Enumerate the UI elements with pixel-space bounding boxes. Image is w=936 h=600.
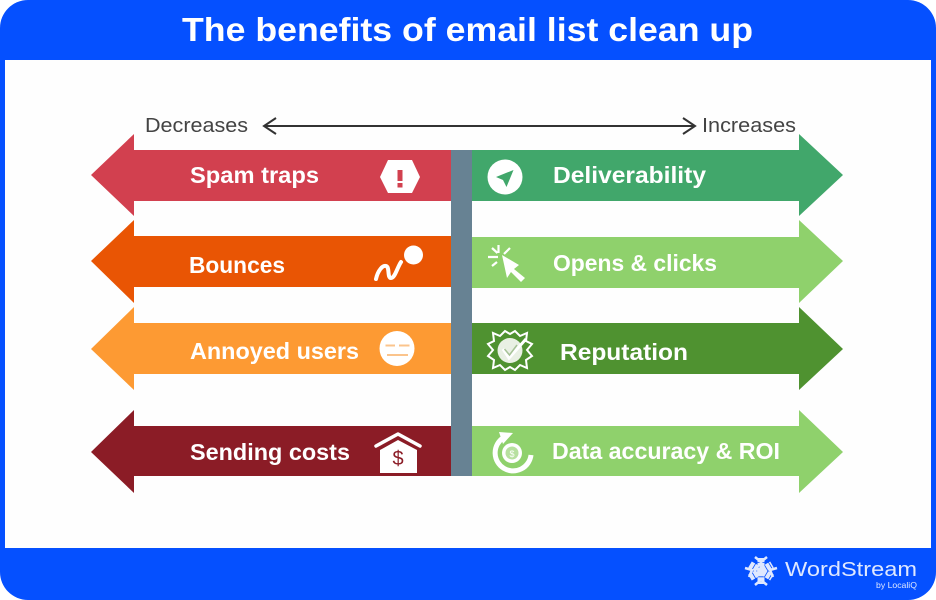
arrow: opens and clicks	[472, 220, 843, 303]
label: sending costs: Sending costs	[190, 439, 350, 465]
icon: annoyed face	[380, 331, 414, 366]
label: deliverability: Deliverability	[553, 162, 706, 188]
icon: house with dollar sign	[376, 434, 420, 473]
icon: bouncing ball	[376, 246, 423, 279]
arrow: sending costs	[91, 410, 451, 493]
icon: snowflake mark	[745, 557, 777, 585]
arrow: data accuracy and ROI	[472, 410, 843, 493]
logo wordmark: WordStream	[785, 558, 917, 581]
label: spam traps: Spam traps	[190, 162, 319, 188]
icon: circular arrow with coin	[495, 432, 531, 471]
title: The benefits of email list clean up	[182, 11, 753, 48]
label: opens and clicks: Opens & clicks	[553, 250, 717, 276]
logo: WordStream by LocaliQ	[745, 557, 917, 590]
logo tagline: by LocaliQ	[876, 580, 917, 590]
arrow: annoyed users	[91, 307, 451, 390]
icon: cursor click	[488, 245, 525, 282]
label: annoyed users: Annoyed users	[190, 338, 359, 364]
scale label: decreases: Decreases	[145, 115, 248, 137]
arrow: deliverability	[472, 134, 843, 216]
double-headed scale arrow	[264, 118, 695, 134]
scale label: increases: Increases	[702, 115, 796, 137]
arrow: bounces	[91, 220, 451, 303]
arrow: reputation	[472, 307, 843, 390]
icon: reputation badge	[488, 331, 532, 370]
icon: circular arrow with coin: $	[509, 449, 515, 459]
icon: house with dollar sign: $	[392, 448, 404, 470]
label: bounces: Bounces	[189, 252, 285, 278]
icon: warning hexagon	[380, 160, 420, 193]
icon: paper plane	[488, 160, 522, 194]
center divider bar	[451, 150, 472, 476]
label: data accuracy and ROI: Data accuracy & ROI	[552, 438, 780, 464]
arrow: spam traps	[91, 134, 451, 216]
label: reputation: Reputation	[560, 339, 688, 365]
